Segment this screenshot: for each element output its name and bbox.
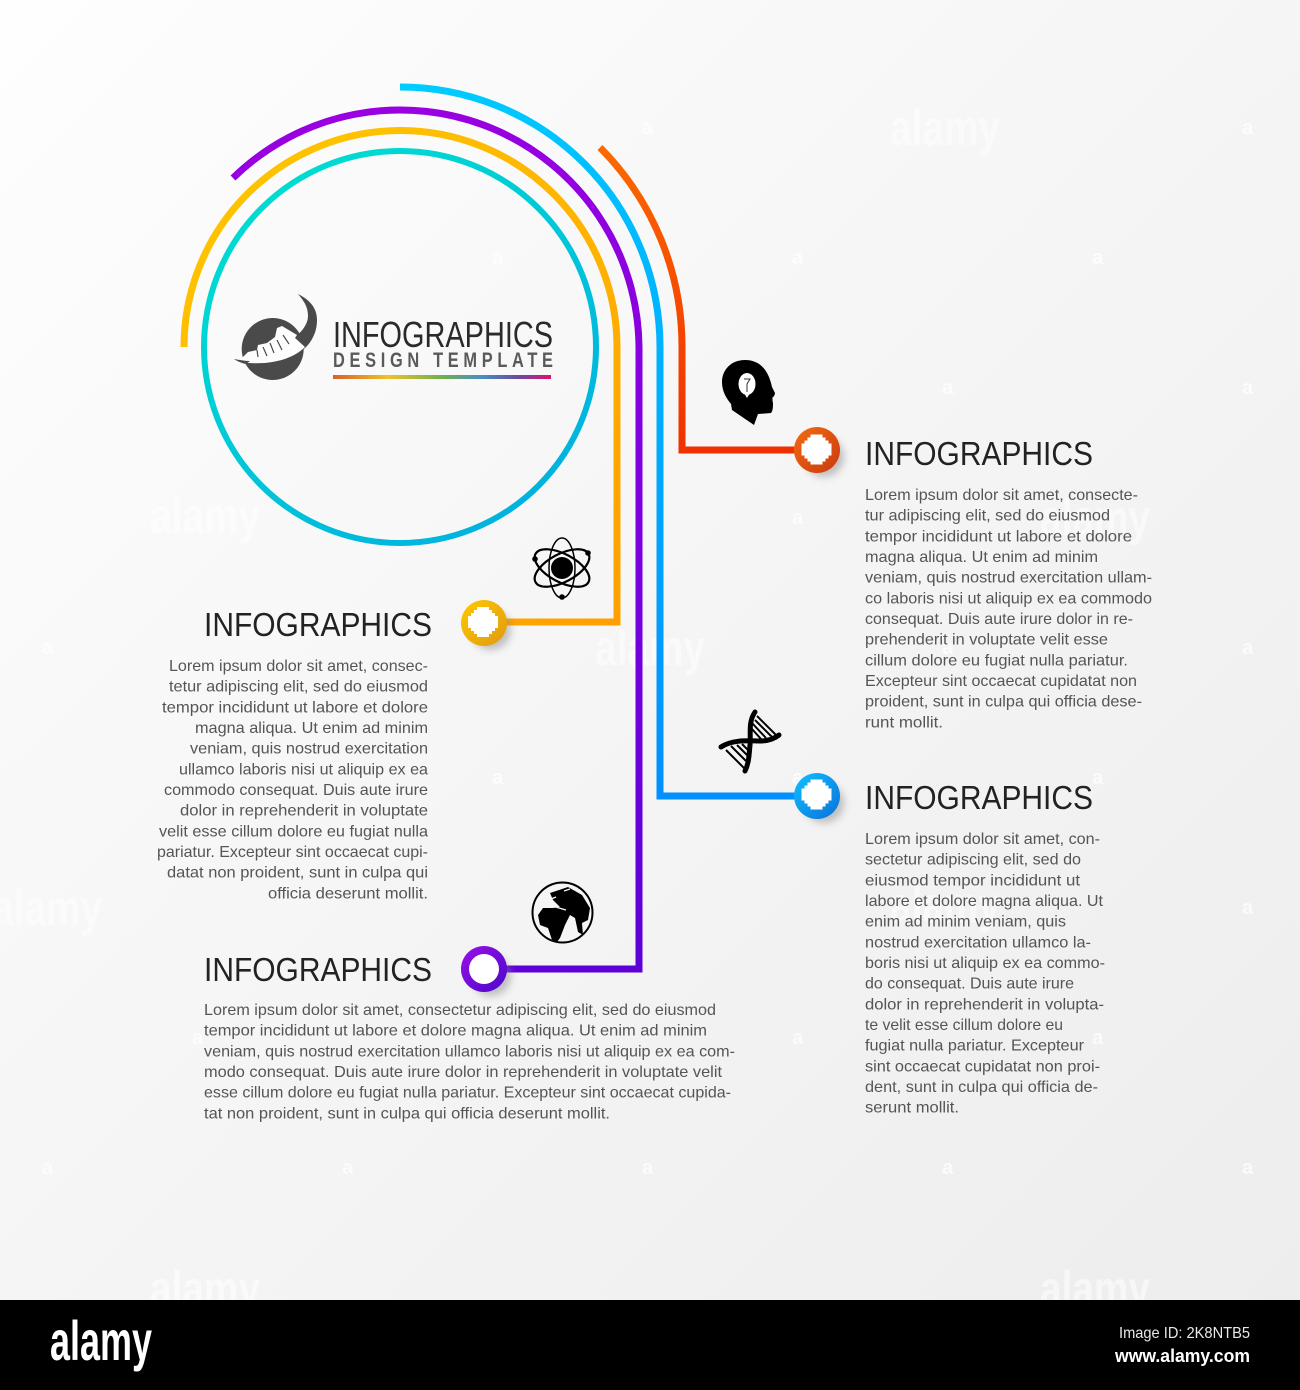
heading: yellow step: INFOGRAPHICS bbox=[204, 606, 432, 643]
watermarks: alamy bbox=[595, 620, 705, 676]
watermarks: a bbox=[792, 507, 804, 529]
text: purple step: esse cillum dolore eu fugiat nulla pariatur. Excepteur sint occaecat cupida- bbox=[204, 1085, 731, 1102]
watermarks: a bbox=[792, 767, 804, 789]
node: purple bbox=[461, 946, 511, 996]
text: purple step: veniam, quis nostrud exercitation ullamco laboris nisi ut aliquip ex ea com- bbox=[204, 1043, 735, 1060]
text: blue step: do consequat. Duis aute irure bbox=[865, 976, 1074, 993]
text: red step: Lorem ipsum dolor sit amet, consecte- bbox=[865, 487, 1138, 504]
text: red step: proident, sunt in culpa qui officia dese- bbox=[865, 694, 1142, 711]
text: purple step bbox=[204, 1002, 735, 1122]
text: red step: magna aliqua. Ut enim ad minim bbox=[865, 549, 1098, 566]
text: red step: consequat. Duis aute irure dolor in re- bbox=[865, 611, 1133, 628]
text: blue step: te velit esse cillum dolore eu bbox=[865, 1017, 1063, 1034]
node: blue bbox=[794, 773, 844, 823]
watermarks: alamy bbox=[1040, 490, 1150, 546]
text: blue step: sint occaecat cupidatat non proi- bbox=[865, 1058, 1100, 1075]
node: yellow bbox=[461, 600, 511, 650]
text: yellow step: tetur adipiscing elit, sed do eiusmod bbox=[169, 679, 428, 696]
icon: DNA helix bbox=[721, 712, 779, 771]
red line to step node bbox=[600, 148, 800, 450]
logo: title text: DESIGN TEMPLATE bbox=[333, 348, 553, 371]
watermarks: a bbox=[42, 637, 54, 659]
text: blue step: nostrud exercitation ullamco la- bbox=[865, 934, 1091, 951]
central teal circle bbox=[204, 151, 596, 543]
text: red step: co laboris nisi ut aliquip ex ea commodo bbox=[865, 590, 1152, 607]
text: red step: veniam, quis nostrud exercitation ullam- bbox=[865, 570, 1152, 587]
text: red step: tur adipiscing elit, sed do eiusmod bbox=[865, 508, 1110, 525]
watermarks: a bbox=[792, 1027, 804, 1049]
text: red step: prehenderit in voluptate velit esse bbox=[865, 632, 1108, 649]
watermarks: a bbox=[642, 117, 654, 139]
text: blue step: sectetur adipiscing elit, sed do bbox=[865, 852, 1081, 869]
text: blue step: labore et dolore magna aliqua. Ut bbox=[865, 893, 1104, 910]
watermarks: alamy bbox=[150, 488, 260, 544]
text: yellow step: velit esse cillum dolore eu fugiat nulla bbox=[159, 823, 428, 840]
footer bar: Image ID: 2K8NTB5 bbox=[1119, 1325, 1250, 1342]
text: purple step: tempor incididunt ut labore et dolore magna aliqua. Ut enim ad minim bbox=[204, 1023, 707, 1040]
blue line to step node bbox=[400, 87, 800, 796]
watermarks: a bbox=[192, 1027, 204, 1049]
watermarks: a bbox=[1242, 377, 1254, 399]
text: yellow step: dolor in reprehenderit in voluptate bbox=[180, 803, 428, 820]
watermarks: a bbox=[1242, 637, 1254, 659]
watermarks: a bbox=[1092, 247, 1104, 269]
text: yellow step: tempor incididunt ut labore et dolore bbox=[162, 699, 428, 716]
watermarks: a bbox=[492, 767, 504, 789]
logo: title text: INFOGRAPHICS bbox=[333, 314, 553, 355]
text: yellow step: commodo consequat. Duis aute irure bbox=[164, 782, 428, 799]
watermarks: alamy bbox=[150, 1261, 260, 1317]
watermarks: a bbox=[942, 1157, 954, 1179]
watermarks: a bbox=[342, 1157, 354, 1179]
text: yellow step: ullamco laboris nisi ut aliquip ex ea bbox=[179, 761, 428, 778]
text: blue step: boris nisi ut aliquip ex ea commo- bbox=[865, 955, 1105, 972]
watermarks: a bbox=[1242, 117, 1254, 139]
text: red step bbox=[865, 487, 1152, 731]
text: blue step: eiusmod tempor incididunt ut bbox=[865, 872, 1081, 889]
watermarks: a bbox=[492, 247, 504, 269]
text: yellow step bbox=[157, 658, 428, 902]
node: red bbox=[794, 427, 844, 477]
icon: atom bbox=[529, 538, 595, 600]
watermarks: a bbox=[942, 377, 954, 399]
text: blue step: dolor in reprehenderit in volupta- bbox=[865, 996, 1104, 1013]
icon: globe bbox=[532, 882, 592, 942]
text: yellow step: pariatur. Excepteur sint occaecat cupi- bbox=[157, 844, 428, 861]
text: yellow step: officia deserunt mollit. bbox=[268, 885, 428, 902]
text: purple step: modo consequat. Duis aute irure dolor in reprehenderit in voluptate velit bbox=[204, 1064, 723, 1081]
watermarks: a bbox=[792, 247, 804, 269]
watermarks: a bbox=[42, 1157, 54, 1179]
watermarks: a bbox=[1092, 767, 1104, 789]
text: red step: tempor incididunt ut labore et dolore bbox=[865, 528, 1132, 545]
text: purple step: Lorem ipsum dolor sit amet, consectetur adipiscing elit, sed do eiusmod bbox=[204, 1002, 716, 1019]
yellow line to step node bbox=[184, 131, 617, 622]
heading: blue step: INFOGRAPHICS bbox=[865, 779, 1093, 816]
watermarks: alamy bbox=[890, 877, 1000, 933]
text: red step: cillum dolore eu fugiat nulla pariatur. bbox=[865, 652, 1128, 669]
icon: head with light bulb bbox=[722, 360, 775, 425]
logo: central emblem bbox=[234, 294, 317, 380]
text: blue step: serunt mollit. bbox=[865, 1100, 959, 1117]
watermarks: a bbox=[1242, 1157, 1254, 1179]
text: yellow step: veniam, quis nostrud exercitation bbox=[190, 741, 428, 758]
watermarks: alamy bbox=[1040, 1261, 1150, 1317]
watermarks: a bbox=[1092, 1027, 1104, 1049]
text: blue step: Lorem ipsum dolor sit amet, con- bbox=[865, 831, 1100, 848]
heading: red step: INFOGRAPHICS bbox=[865, 435, 1093, 472]
text: blue step: fugiat nulla pariatur. Excepteur bbox=[865, 1038, 1085, 1055]
text: blue step: enim ad minim veniam, quis bbox=[865, 914, 1066, 931]
watermarks: alamy bbox=[890, 100, 1000, 156]
footer bar: alamy bbox=[50, 1309, 152, 1372]
watermarks: a bbox=[942, 637, 954, 659]
purple line to step node bbox=[233, 110, 639, 969]
footer bar bbox=[0, 1300, 1300, 1390]
heading: purple step: INFOGRAPHICS bbox=[204, 951, 432, 988]
watermarks: a bbox=[1242, 897, 1254, 919]
text: yellow step: Lorem ipsum dolor sit amet, consec- bbox=[169, 658, 428, 675]
watermarks: a bbox=[642, 1157, 654, 1179]
text: purple step: tat non proident, sunt in culpa qui officia deserunt mollit. bbox=[204, 1105, 610, 1122]
text: red step: runt mollit. bbox=[865, 714, 943, 731]
text: blue step bbox=[865, 831, 1105, 1117]
text: blue step: dent, sunt in culpa qui officia de- bbox=[865, 1079, 1098, 1096]
text: yellow step: datat non proident, sunt in culpa qui bbox=[167, 865, 428, 882]
logo: title text bbox=[333, 314, 553, 379]
text: red step: Excepteur sint occaecat cupidatat non bbox=[865, 673, 1137, 690]
text: yellow step: magna aliqua. Ut enim ad minim bbox=[195, 720, 428, 737]
footer bar: www.alamy.com bbox=[1114, 1346, 1250, 1366]
